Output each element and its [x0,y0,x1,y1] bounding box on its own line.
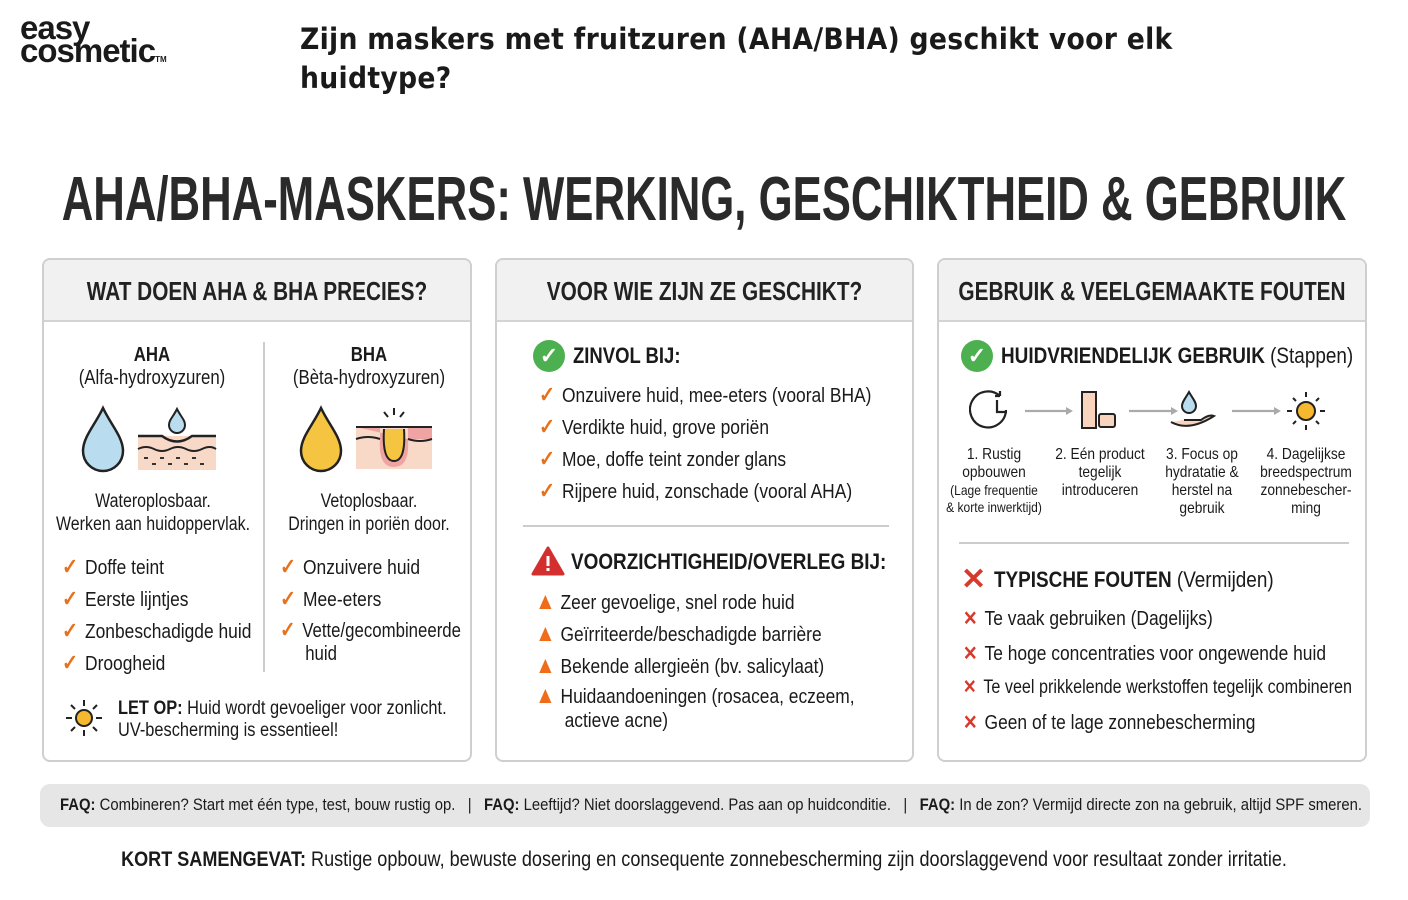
AHA heading [79,344,225,389]
fouten list: ✕ Geen of te lage zonnebescherming [963,712,1255,734]
AHA list: ✓ Zonbeschadigde huid [62,618,251,643]
BHA heading: (Bèta-hydroxyzuren) [293,367,445,389]
zinvol list: ✓ Rijpere huid, zonschade (vooral AHA) [539,478,852,503]
icon: sun [66,700,102,736]
fouten list: ✕ Te veel prikkelende werkstoffen tegelijk combineren [963,677,1352,698]
AHA description: Wateroplosbaar. [95,491,211,512]
panel: gebruik: GEBRUIK & VEELGEMAAKTE FOUTEN [958,276,1346,306]
caution list [535,588,855,732]
AHA description [56,491,250,535]
FAQ bar: FAQ: Combineren? Start met één type, test, bouw rustig op. | FAQ: Leeftijd? Niet doorslaggevend. Pas aan op huidconditie. | FAQ: In de zon? Vermijd directe zon na gebruik, altijd SPF smeren. [60,796,1362,814]
BHA description: Dringen in poriën door. [288,514,450,535]
AHA list: ✓ Droogheid [62,650,165,675]
step labels: opbouwen [962,464,1026,481]
step labels: (Lage frequentie [950,482,1038,498]
step labels [946,446,1352,517]
step labels: 1. Rustig [967,446,1021,463]
logo: cosmeticTM [20,32,167,69]
header question: huidtype? [300,61,452,95]
caution heading: VOORZICHTIGHEID/OVERLEG BIJ: [571,549,886,574]
BHA heading [293,344,445,389]
icon: BHA drop and pore [300,405,432,472]
zinvol list: ✓ Verdikte huid, grove poriën [539,414,769,439]
icon: AHA drop and skin [82,405,216,472]
logo [20,9,167,69]
AHA list [62,554,251,675]
step labels: tegelijk [1079,464,1121,481]
callout: let op: UV-bescherming is essentieel! [118,719,338,741]
panel: gebruik [937,258,1367,762]
header question: Zijn maskers met fruitzuren (AHA/BHA) geschikt voor elk [300,22,1173,56]
step labels: breedspectrum [1260,464,1352,481]
AHA description: Werken aan huidoppervlak. [56,514,250,535]
gebruik heading: HUIDVRIENDELIJK GEBRUIK (Stappen) [1001,343,1353,368]
BHA description: Vetoplosbaar. [321,491,417,512]
fouten heading: ✕ [961,563,986,596]
logo: easy [20,9,89,46]
zinvol heading: ✓ [540,343,558,368]
step labels: zonnebescher- [1260,482,1352,499]
step labels: 4. Dagelijkse [1267,446,1345,463]
fouten list [963,608,1352,734]
AHA list: ✓ Eerste lijntjes [62,586,188,611]
zinvol list: ✓ Onzuivere huid, mee-eters (vooral BHA) [539,382,871,407]
main title: AHA/BHA-MASKERS: WERKING, GESCHIKTHEID & GEBRUIK [62,165,1346,234]
BHA list: huid [305,643,337,665]
caution list: ▲ Geïrriteerde/beschadigde barrière [535,620,822,647]
AHA heading: (Alfa-hydroxyzuren) [79,367,225,389]
BHA heading: BHA [351,344,387,366]
panel: voor wie: VOOR WIE ZIJN ZE GESCHIKT? [547,276,862,306]
zinvol heading: ZINVOL BIJ: [573,343,680,368]
callout: let op [118,697,447,741]
step labels: introduceren [1062,482,1138,499]
BHA list: ✓ Onzuivere huid [280,554,420,579]
BHA list: ✓ Vette/gecombineerde [280,617,461,642]
summary: KORT SAMENGEVAT: Rustige opbouw, bewuste dosering en consequente zonnebescherming zijn doorslaggevend voor resultaat zonder irritatie. [121,848,1287,871]
header question [300,22,1173,95]
caution list: actieve acne) [565,710,668,732]
zinvol list [539,382,871,503]
callout: let op: LET OP: Huid wordt gevoeliger voor zonlicht. [118,697,447,719]
zinvol heading [533,340,680,372]
caution list: ▲ Bekende allergieën (bv. salicylaat) [535,652,824,679]
step labels: 3. Focus op [1166,446,1238,463]
panel: wat doen: WAT DOEN AHA & BHA PRECIES? [87,276,427,306]
panel: voor wie [495,258,914,762]
fouten heading: TYPISCHE FOUTEN (Vermijden) [994,567,1274,592]
panel: wat doen [42,258,472,762]
BHA list [280,554,461,665]
fouten list: ✕ Te vaak gebruiken (Dagelijks) [963,608,1213,630]
caution list: ▲ Zeer gevoelige, snel rode huid [535,588,795,615]
step labels: ming [1291,500,1321,517]
fouten heading [961,563,1274,596]
zinvol list: ✓ Moe, doffe teint zonder glans [539,446,786,471]
step labels: hydratatie & [1165,464,1239,481]
gebruik heading: ✓ [968,343,986,368]
step labels: 2. Eén product [1055,446,1145,463]
fouten list: ✕ Te hoge concentraties voor ongewende huid [963,643,1326,665]
step labels: herstel na [1172,482,1232,499]
BHA list: ✓ Mee-eters [280,586,381,611]
BHA description [288,491,450,535]
steps icons [969,390,1325,430]
caution list: ▲ Huidaandoeningen (rosacea, eczeem, [535,682,855,709]
step labels: gebruik [1179,500,1225,517]
AHA list: ✓ Doffe teint [62,554,164,579]
FAQ bar [40,784,1370,827]
AHA heading: AHA [134,344,170,366]
step labels: & korte inwerktijd) [946,499,1042,515]
